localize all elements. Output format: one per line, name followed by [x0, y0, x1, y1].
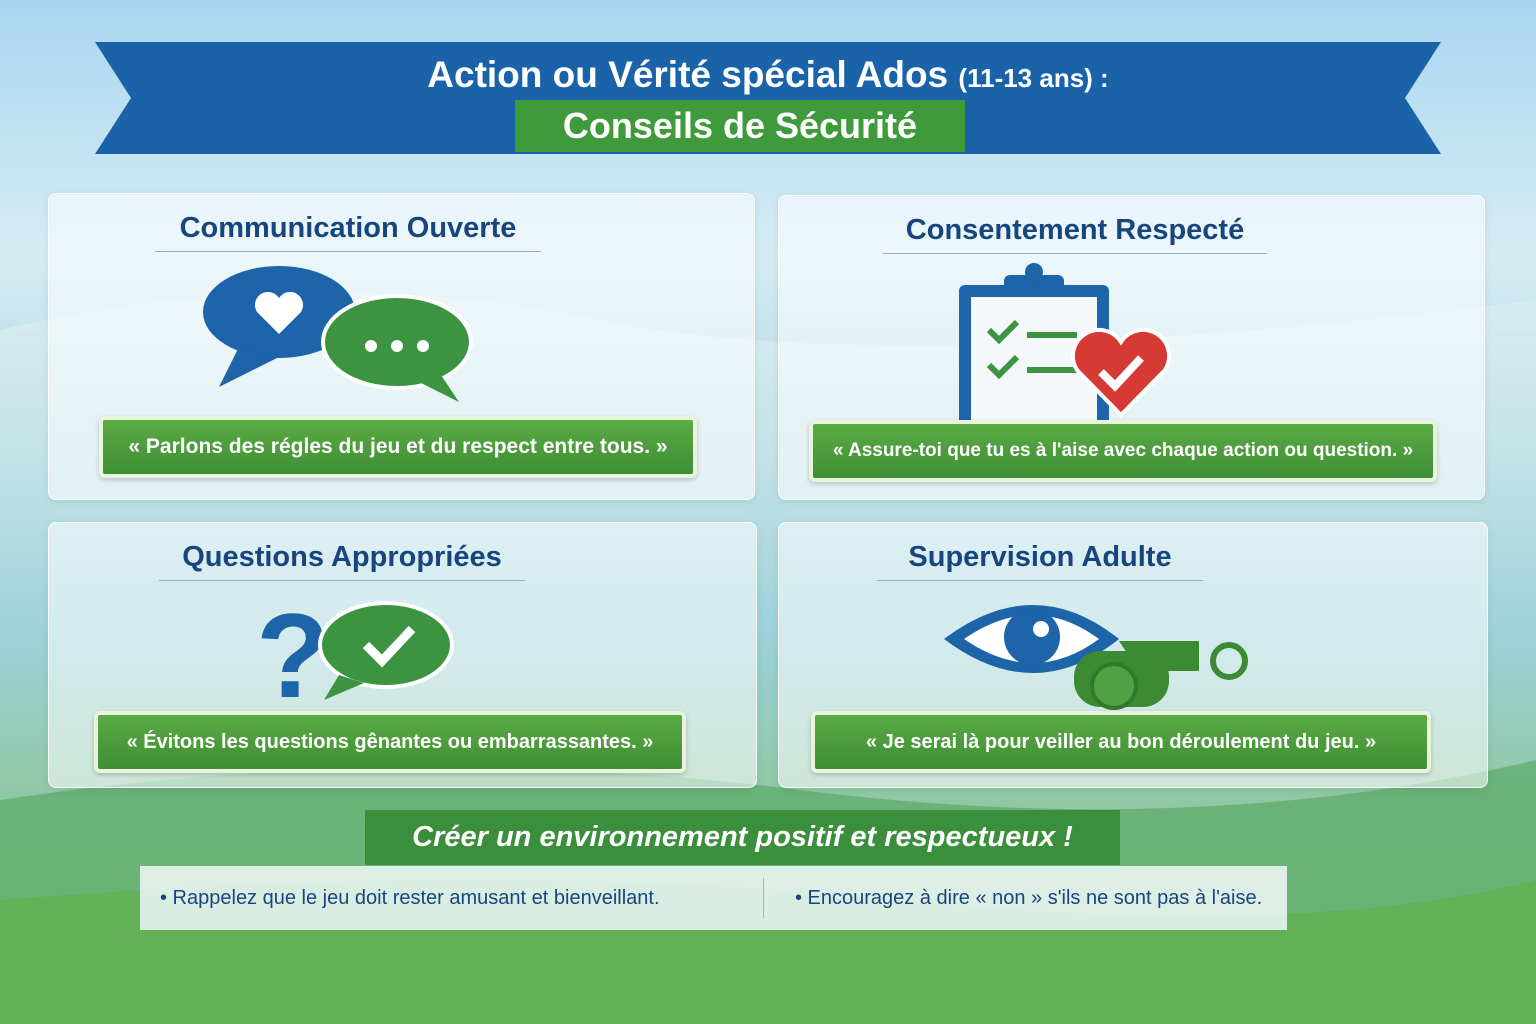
- heading: [877, 541, 1203, 581]
- bottom banner: Créer un environnement positif et respectueux !: [412, 821, 1073, 853]
- quote: « Évitons les questions gênantes ou embarrassantes. »: [127, 730, 653, 752]
- quote: « Je serai là pour veiller au bon déroulement du jeu. »: [866, 730, 1376, 752]
- title banner: [95, 42, 1441, 154]
- tip 1: • Rappelez que le jeu doit rester amusant et bienveillant.: [160, 887, 660, 909]
- panel: communication: [48, 193, 755, 500]
- panel: consentement: [778, 195, 1485, 500]
- icon: eye whistle: [944, 605, 1248, 710]
- heading: Communication Ouverte: [180, 212, 516, 244]
- subtitle: Conseils de Sécurité: [563, 105, 917, 146]
- quote: « Parlons des régles du jeu et du respect entre tous. »: [128, 435, 668, 458]
- heading: Consentement Respecté: [906, 214, 1244, 246]
- heading: [159, 541, 525, 581]
- title text: Action ou Vérité spécial Ados (11-13 ans) :: [427, 54, 1109, 95]
- quote: [99, 416, 697, 478]
- icon: question check: [256, 589, 454, 705]
- quote: [94, 711, 686, 773]
- heading: Supervision Adulte: [908, 541, 1172, 573]
- quote: [811, 711, 1431, 773]
- icon: clipboard heart: [959, 263, 1171, 420]
- heading: Questions Appropriées: [182, 541, 502, 573]
- bottom banner: [365, 810, 1120, 865]
- quote: « Assure-toi que tu es à l'aise avec chaque action ou question. »: [833, 440, 1413, 461]
- panel: questions: [48, 522, 757, 788]
- heading: [155, 212, 541, 252]
- tips box: [140, 866, 1287, 930]
- tip 2: • Encouragez à dire « non » s'ils ne sont pas à l'aise.: [795, 887, 1262, 909]
- panel: supervision: [778, 522, 1488, 788]
- subtitle: [515, 100, 965, 152]
- quote: [809, 420, 1437, 482]
- icon: chat bubbles: [203, 266, 473, 402]
